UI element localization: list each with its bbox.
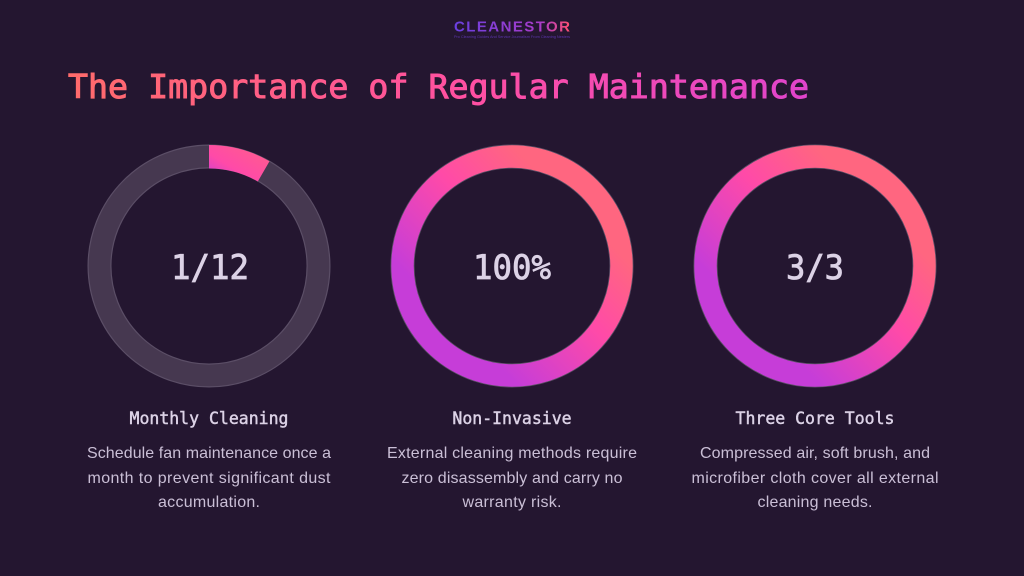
stat: 1/12: 1/12 xyxy=(171,248,249,287)
description: three core tools: microfiber cloth cover all external xyxy=(692,470,938,487)
ring chart: 100% xyxy=(402,156,622,376)
logo wordmark: CLEANESTOR xyxy=(454,18,570,36)
stat: 3/3: 3/3 xyxy=(786,248,844,287)
heading: three core tools: Three Core Tools xyxy=(736,409,894,428)
title: The Importance of Regular Maintenance xyxy=(68,67,809,106)
description: monthly cleaning: Schedule fan maintenance once a xyxy=(87,445,331,462)
panel: non-invasive xyxy=(387,156,637,511)
logo xyxy=(454,18,570,39)
description: monthly cleaning xyxy=(87,445,331,511)
panel: three core tools xyxy=(692,156,938,511)
ring chart: 1/12 xyxy=(100,145,318,376)
heading: non-invasive: Non-Invasive xyxy=(452,409,572,428)
description: non-invasive xyxy=(387,445,637,511)
description: non-invasive: External cleaning methods require xyxy=(387,445,637,462)
logo tagline: Pro Cleaning Guides And Service Journalism From Cleaning Nesters xyxy=(454,35,570,39)
description: three core tools xyxy=(692,445,938,511)
description: non-invasive: warranty risk. xyxy=(462,494,562,511)
description: non-invasive: zero disassembly and carry no xyxy=(402,470,623,487)
ring chart: 3/3 xyxy=(706,156,924,376)
description: three core tools: cleaning needs. xyxy=(758,494,872,511)
description: three core tools: Compressed air, soft brush, and xyxy=(700,445,930,462)
description: monthly cleaning: month to prevent significant dust xyxy=(88,470,331,487)
heading: monthly cleaning: Monthly Cleaning xyxy=(130,409,288,428)
description: monthly cleaning: accumulation. xyxy=(158,494,260,511)
panel: monthly cleaning xyxy=(87,145,331,511)
stat: 100%: 100% xyxy=(473,248,551,287)
